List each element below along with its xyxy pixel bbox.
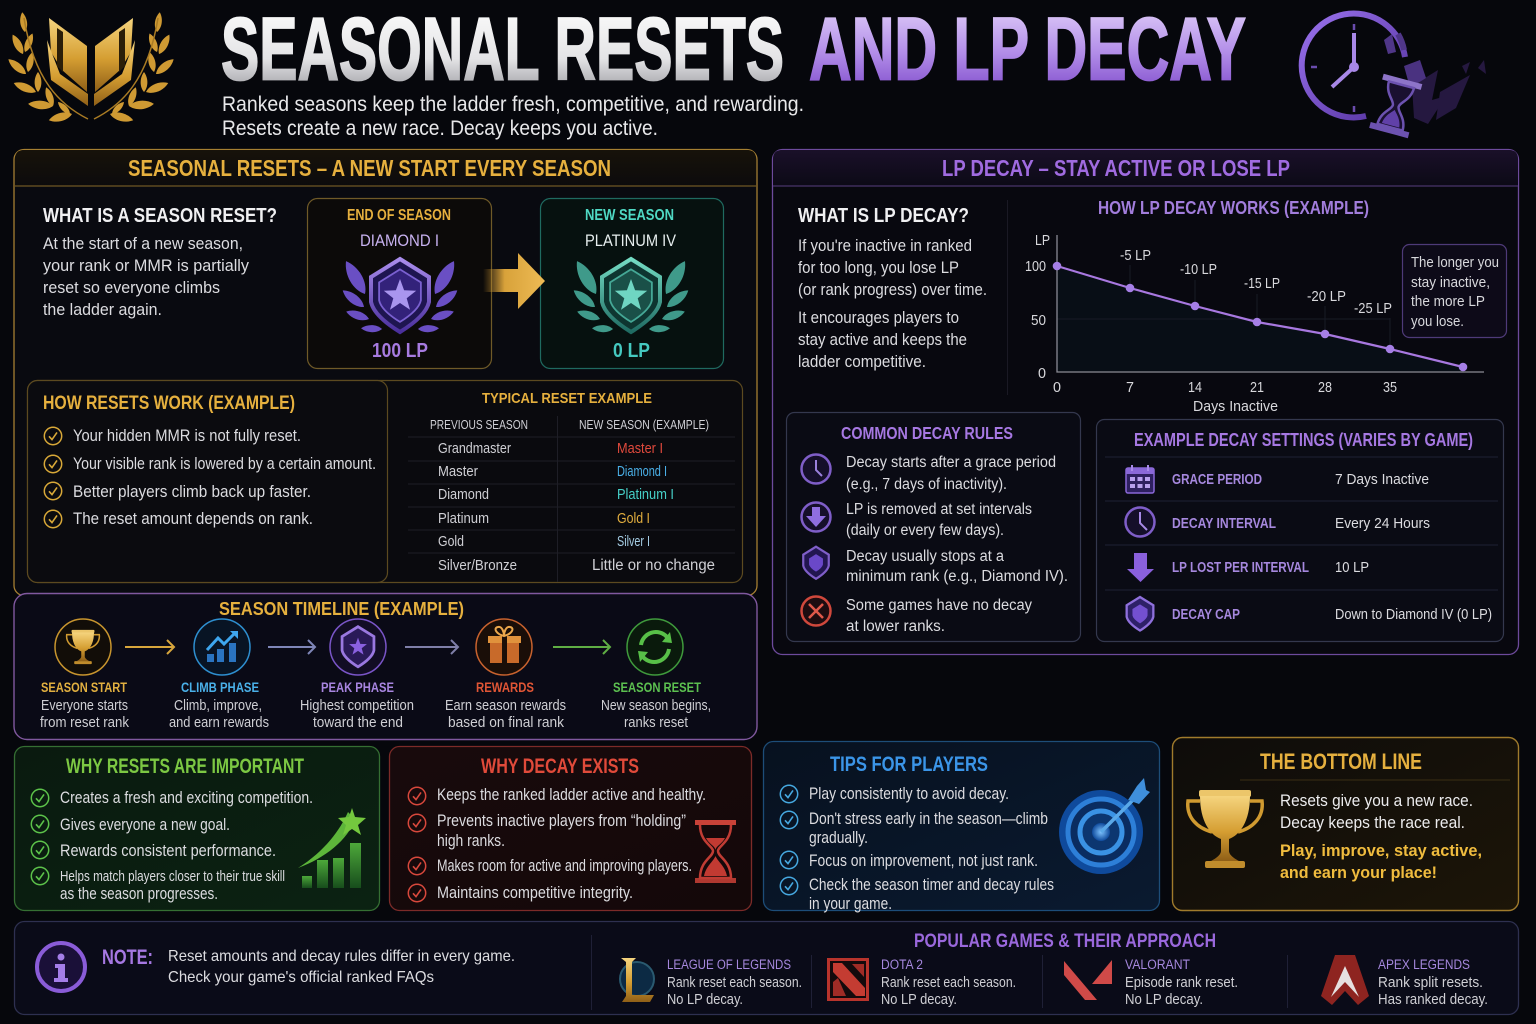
callout: the longer you stay inactive: stay inactive, — [1411, 275, 1490, 291]
game: dota 2: No LP decay. — [881, 992, 957, 1008]
text: what is a season reset: your rank or MMR is partially — [43, 257, 250, 275]
table: typical reset example: PREVIOUS SEASON — [430, 418, 528, 432]
panel: why resets are important: WHY RESETS ARE IMPORTANT — [66, 755, 304, 778]
table: typical reset example: Little or no change — [592, 557, 715, 574]
card: end of season — [308, 198, 492, 368]
step: rewards: based on final rank — [448, 715, 565, 731]
step: rewards — [445, 619, 566, 731]
chart: how lp decay works: 14 — [1188, 380, 1202, 396]
text: what is a season reset: WHAT IS A SEASON RESET? — [43, 205, 277, 227]
icon: shield — [1127, 597, 1153, 631]
table: typical reset example: Platinum I — [617, 487, 674, 503]
chart: how lp decay works: -15 LP — [1244, 276, 1280, 292]
icon: platinum badge — [571, 258, 691, 333]
title: AND LP DECAY — [809, 0, 1246, 98]
text: setting labels and values: 10 LP — [1335, 559, 1369, 576]
game: league of legends: Rank reset each season. — [667, 975, 802, 991]
panel: tips for players: Check the season timer and decay rules — [809, 876, 1054, 894]
chart: how lp decay works: LP — [1035, 233, 1050, 249]
table: typical reset example: Grandmaster — [438, 441, 511, 457]
game: league of legends — [620, 957, 802, 1008]
step: climb phase: CLIMB PHASE — [181, 680, 259, 695]
game: league of legends: No LP decay. — [667, 992, 743, 1008]
text: bottom line message: Decay keeps the race real. — [1280, 813, 1465, 832]
text: what is lp decay: ladder competitive. — [798, 353, 926, 371]
text: what is lp decay: It encourages players to — [798, 309, 959, 327]
panel: season timeline — [14, 594, 757, 740]
panel: why resets are important: Helps match players closer to their true skill — [60, 868, 285, 885]
icon: clock — [802, 454, 830, 484]
step: season reset: New season begins, — [601, 698, 711, 714]
card: end of season: END OF SEASON — [347, 207, 451, 224]
panel: why decay exists: high ranks. — [437, 832, 505, 850]
subtitle: Ranked seasons keep the ladder fresh, competitive, and rewarding. — [222, 93, 804, 116]
step: peak phase — [300, 619, 414, 731]
panel: how resets work: Better players climb back up faster. — [73, 483, 311, 501]
text: setting labels and values — [1172, 471, 1492, 623]
icon: target with arrow — [1059, 778, 1150, 874]
text: what is lp decay: (or rank progress) over time. — [798, 281, 987, 299]
text: note: NOTE: — [102, 946, 153, 969]
subtitle — [222, 93, 804, 140]
table: typical reset example: Diamond — [438, 487, 489, 503]
chart: how lp decay works: Days Inactive — [1193, 399, 1278, 415]
panel header band — [15, 150, 756, 186]
panel: why resets are important: as the season progresses. — [60, 885, 218, 903]
icon: clock and hourglass with shards — [1302, 13, 1486, 138]
arrow — [125, 640, 174, 654]
panel: tips for players — [764, 742, 1160, 913]
chart: how lp decay works: 35 — [1383, 380, 1397, 396]
arrow — [553, 640, 610, 654]
step: peak phase: Highest competition — [300, 698, 414, 714]
title: SEASONAL RESETS — [221, 0, 784, 98]
table: typical reset example: Platinum — [438, 511, 489, 527]
step: peak phase: toward the end — [313, 715, 403, 731]
step: climb phase: and earn rewards — [169, 715, 269, 731]
text: what is a season reset: At the start of a new season, — [43, 235, 243, 253]
heading: lp decay: LP DECAY – STAY ACTIVE OR LOSE LP — [942, 155, 1290, 181]
panel: tips for players: gradually. — [809, 829, 868, 847]
callout: the longer you stay inactive — [1402, 244, 1506, 338]
panel: how resets work: Your visible rank is lowered by a certain amount. — [73, 455, 376, 473]
text: decay rules: Decay starts after a grace period — [846, 454, 1056, 471]
text: what is lp decay — [798, 205, 987, 371]
chart: how lp decay works: -20 LP — [1307, 289, 1346, 305]
icon: no decay — [802, 596, 830, 626]
step: season start — [40, 619, 130, 731]
card: end of season: 100 LP — [372, 340, 428, 362]
card: new season — [540, 198, 724, 368]
game: league of legends: LEAGUE OF LEGENDS — [667, 957, 791, 972]
step: climb phase — [169, 619, 269, 731]
panel: how resets work: Your hidden MMR is not fully reset. — [73, 427, 301, 445]
game: apex legends: APEX LEGENDS — [1378, 957, 1470, 972]
text: what is a season reset: reset so everyone climbs — [43, 279, 220, 297]
text: decay rules: Decay usually stops at a — [846, 548, 1004, 565]
chart: how lp decay works: 28 — [1318, 380, 1332, 396]
step: peak phase: PEAK PHASE — [321, 680, 394, 695]
panel: lp decay — [772, 150, 1518, 654]
arrow — [405, 640, 458, 654]
step: season start: from reset rank — [40, 715, 130, 731]
chart: how lp decay works — [1025, 198, 1484, 415]
text: what is lp decay: If you're inactive in ranked — [798, 237, 972, 255]
table: typical reset example: NEW SEASON (EXAMPLE) — [579, 418, 709, 432]
chart: how lp decay works: 50 — [1031, 313, 1046, 329]
panel: common decay rules — [786, 412, 1080, 642]
callout: the longer you stay inactive: the more LP — [1411, 294, 1485, 310]
text: setting labels and values: 7 Days Inactive — [1335, 471, 1429, 488]
text: what is lp decay: stay active and keeps the — [798, 331, 967, 349]
game: apex legends: Rank split resets. — [1378, 975, 1483, 991]
text: setting labels and values: DECAY CAP — [1172, 607, 1240, 623]
panel: note and popular games — [14, 922, 1518, 1014]
text: bottom line message: Play, improve, stay active, — [1280, 841, 1482, 860]
icon: rising bars and star — [298, 808, 366, 888]
text: bottom line message — [1280, 791, 1482, 882]
text: setting labels and values: DECAY INTERVAL — [1172, 516, 1276, 532]
game: valorant: No LP decay. — [1125, 992, 1203, 1008]
step: season reset: SEASON RESET — [613, 680, 702, 695]
text: setting labels and values: Down to Diamond IV (0 LP) — [1335, 606, 1492, 623]
panel: why resets are important — [14, 746, 380, 910]
step: season start: SEASON START — [41, 680, 128, 695]
icon: down arrow — [802, 502, 830, 532]
game: dota 2: Rank reset each season. — [881, 975, 1016, 991]
panel: tips for players: Play consistently to avoid decay. — [809, 785, 1009, 803]
text: note: Check your game's official ranked FAQs — [168, 969, 434, 986]
game: dota 2: DOTA 2 — [881, 957, 923, 972]
game: valorant: Episode rank reset. — [1125, 975, 1238, 991]
step: climb phase: Climb, improve, — [174, 698, 262, 714]
text: setting labels and values: LP LOST PER INTERVAL — [1172, 560, 1309, 576]
panel: how resets work: HOW RESETS WORK (EXAMPLE) — [43, 393, 295, 414]
game: apex legends: Has ranked decay. — [1378, 992, 1488, 1008]
icon: calendar — [1126, 465, 1154, 493]
game: valorant — [1064, 957, 1238, 1008]
table: typical reset example: Master — [438, 464, 478, 480]
icon: hourglass — [695, 820, 736, 883]
arrow — [268, 640, 315, 654]
text: decay rules: minimum rank (e.g., Diamond IV). — [846, 568, 1068, 585]
panel: tips for players: in your game. — [809, 895, 892, 913]
text: what is lp decay: for too long, you lose LP — [798, 259, 959, 277]
table: typical reset example — [408, 390, 735, 582]
callout: the longer you stay inactive: The longer you — [1411, 255, 1499, 271]
text: decay rules: (e.g., 7 days of inactivity). — [846, 476, 1007, 493]
table: typical reset example: Diamond I — [617, 464, 667, 480]
chart: how lp decay works: 0 — [1038, 366, 1046, 382]
panel: tips for players: TIPS FOR PLAYERS — [830, 753, 988, 776]
chart: how lp decay works: 21 — [1250, 380, 1264, 396]
panel: how resets work — [28, 380, 742, 582]
icon: down arrow — [1127, 553, 1154, 582]
step: rewards: Earn season rewards — [445, 698, 566, 714]
text: decay rules: at lower ranks. — [846, 618, 945, 635]
panel header band — [773, 150, 1518, 186]
text: decay rules: LP is removed at set intervals — [846, 501, 1032, 518]
chart: how lp decay works: -25 LP — [1354, 301, 1392, 317]
text: setting labels and values: GRACE PERIOD — [1172, 472, 1262, 488]
card: new season: 0 LP — [613, 340, 650, 362]
subtitle: Resets create a new race. Decay keeps you active. — [222, 117, 658, 140]
panel: how resets work: The reset amount depends on rank. — [73, 510, 313, 528]
text: what is a season reset: the ladder again. — [43, 301, 162, 319]
arrow: season change — [483, 253, 545, 309]
chart: how lp decay works: -5 LP — [1120, 248, 1151, 264]
text: decay rules: (daily or every few days). — [846, 522, 1004, 539]
text: decay rules — [846, 454, 1068, 635]
text: what is a season reset — [43, 205, 277, 319]
game: apex legends — [1321, 955, 1488, 1008]
callout: the longer you stay inactive: you lose. — [1411, 314, 1464, 330]
panel: tips for players: Focus on improvement, not just rank. — [809, 852, 1038, 870]
text: bottom line message: and earn your place! — [1280, 863, 1437, 882]
step: season reset: ranks reset — [624, 715, 688, 731]
text: setting labels and values: Every 24 Hours — [1335, 515, 1430, 532]
icon: shield — [803, 547, 829, 579]
chart: how lp decay works: 100 — [1025, 259, 1046, 275]
game: valorant: VALORANT — [1125, 957, 1190, 972]
emblem: gold split shield with laurels — [6, 12, 176, 124]
panel: common decay rules: COMMON DECAY RULES — [841, 423, 1013, 443]
heading: popular games: POPULAR GAMES & THEIR APPROACH — [914, 930, 1216, 952]
icon: diamond badge — [340, 258, 460, 333]
table: typical reset example: Gold I — [617, 511, 650, 527]
chart: how lp decay works: 7 — [1126, 380, 1134, 396]
chart: how lp decay works: 0 — [1053, 380, 1061, 396]
panel: why resets are important: Rewards consistent performance. — [60, 842, 276, 860]
panel: example decay settings — [1096, 420, 1504, 642]
table: typical reset example: Silver I — [617, 534, 650, 550]
panel: seasonal resets — [14, 150, 757, 596]
panel: the bottom line — [1172, 738, 1518, 910]
panel: why decay exists — [390, 746, 752, 910]
icon: info — [37, 943, 85, 991]
icon: clock — [1126, 508, 1154, 536]
panel: why resets are important: Gives everyone a new goal. — [60, 816, 230, 834]
game: dota 2 — [828, 957, 1016, 1008]
panel: the bottom line: THE BOTTOM LINE — [1260, 749, 1422, 774]
table: typical reset example: Silver/Bronze — [438, 558, 517, 574]
heading: seasonal resets: SEASONAL RESETS – A NEW START EVERY SEASON — [128, 155, 611, 181]
panel: why resets are important: Creates a fresh and exciting competition. — [60, 789, 313, 807]
text: note: Reset amounts and decay rules differ in every game. — [168, 948, 515, 965]
step: season reset — [601, 619, 711, 731]
panel: season timeline: SEASON TIMELINE (EXAMPLE) — [219, 598, 464, 619]
text: note — [102, 946, 515, 986]
panel: why decay exists: Makes room for active and improving players. — [437, 857, 692, 875]
text: decay rules: Some games have no decay — [846, 597, 1032, 614]
chart: how lp decay works: -10 LP — [1180, 262, 1217, 278]
chart: how lp decay works: HOW LP DECAY WORKS (EXAMPLE) — [1098, 198, 1369, 218]
step: rewards: REWARDS — [476, 680, 534, 695]
table: typical reset example: TYPICAL RESET EXAMPLE — [482, 390, 652, 407]
panel: why decay exists: Keeps the ranked ladder active and healthy. — [437, 786, 706, 804]
text: what is lp decay: WHAT IS LP DECAY? — [798, 205, 969, 227]
card: new season: NEW SEASON — [585, 207, 674, 224]
panel: why decay exists: Prevents inactive players from “holding” — [437, 812, 686, 830]
panel: tips for players: Don't stress early in the season—climb — [809, 810, 1048, 828]
card: new season: PLATINUM IV — [585, 231, 677, 250]
panel: why decay exists: WHY DECAY EXISTS — [481, 755, 639, 778]
card: end of season: DIAMOND I — [360, 231, 439, 250]
icon: trophy — [1188, 790, 1262, 868]
table: typical reset example: Master I — [617, 441, 663, 457]
step: season start: Everyone starts — [41, 698, 128, 714]
text: bottom line message: Resets give you a new race. — [1280, 791, 1473, 810]
table: typical reset example: Gold — [438, 534, 464, 550]
panel: why decay exists: Maintains competitive integrity. — [437, 884, 633, 902]
